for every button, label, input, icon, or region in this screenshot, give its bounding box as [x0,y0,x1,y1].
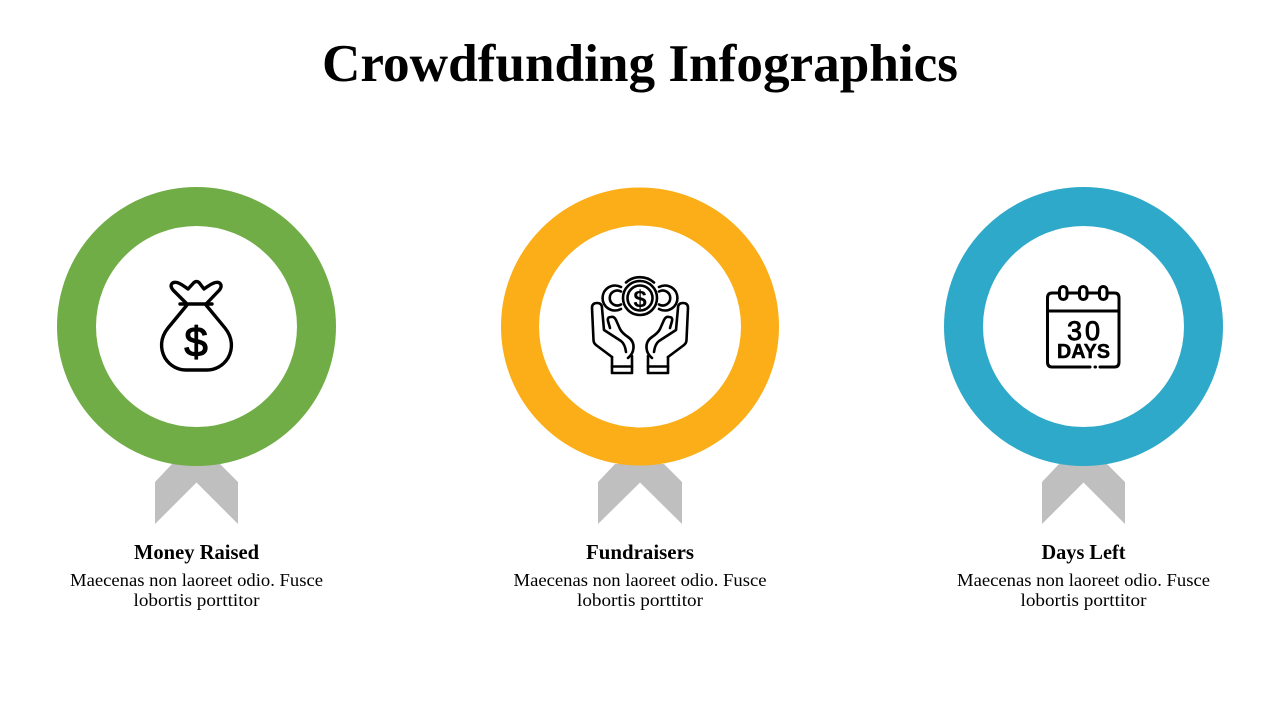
text: fundraisers description: Maecenas non laoreet odio. Fusce [514,570,767,590]
text: fundraisers description [514,570,767,610]
text: days left description [957,570,1210,610]
icon: calendar 30 days: DAYS [1057,341,1110,363]
icon: hands holding coins [592,277,688,373]
ribbon: days left [1042,464,1125,524]
text: money raised description: lobortis porttitor [134,590,260,610]
panel: days left [957,206,1210,610]
ring: green [76,206,316,446]
ring: orange [520,206,760,446]
ring: blue [964,206,1204,446]
text: days left description: Maecenas non laoreet odio. Fusce [957,570,1210,590]
icon: calendar 30 days: 30 [1067,316,1100,346]
text: fundraisers description: lobortis porttitor [577,590,703,610]
heading: days left: Days Left [1042,540,1126,564]
text: money raised description [70,570,323,610]
title: Crowdfunding Infographics [322,35,958,93]
panel: fundraisers [514,206,767,610]
icon: calendar 30 days [1048,286,1119,367]
panel: money raised [70,206,323,610]
heading: fundraisers: Fundraisers [586,540,694,564]
icon: money bag: $ [184,318,208,365]
icon: money bag [162,282,231,370]
text: money raised description: Maecenas non laoreet odio. Fusce [70,570,323,590]
text: days left description: lobortis porttitor [1020,590,1147,610]
heading: money raised: Money Raised [134,540,259,564]
ribbon: fundraisers [598,464,682,524]
icon: hands holding coins: $ [633,286,647,313]
ribbon: money raised [155,464,238,524]
